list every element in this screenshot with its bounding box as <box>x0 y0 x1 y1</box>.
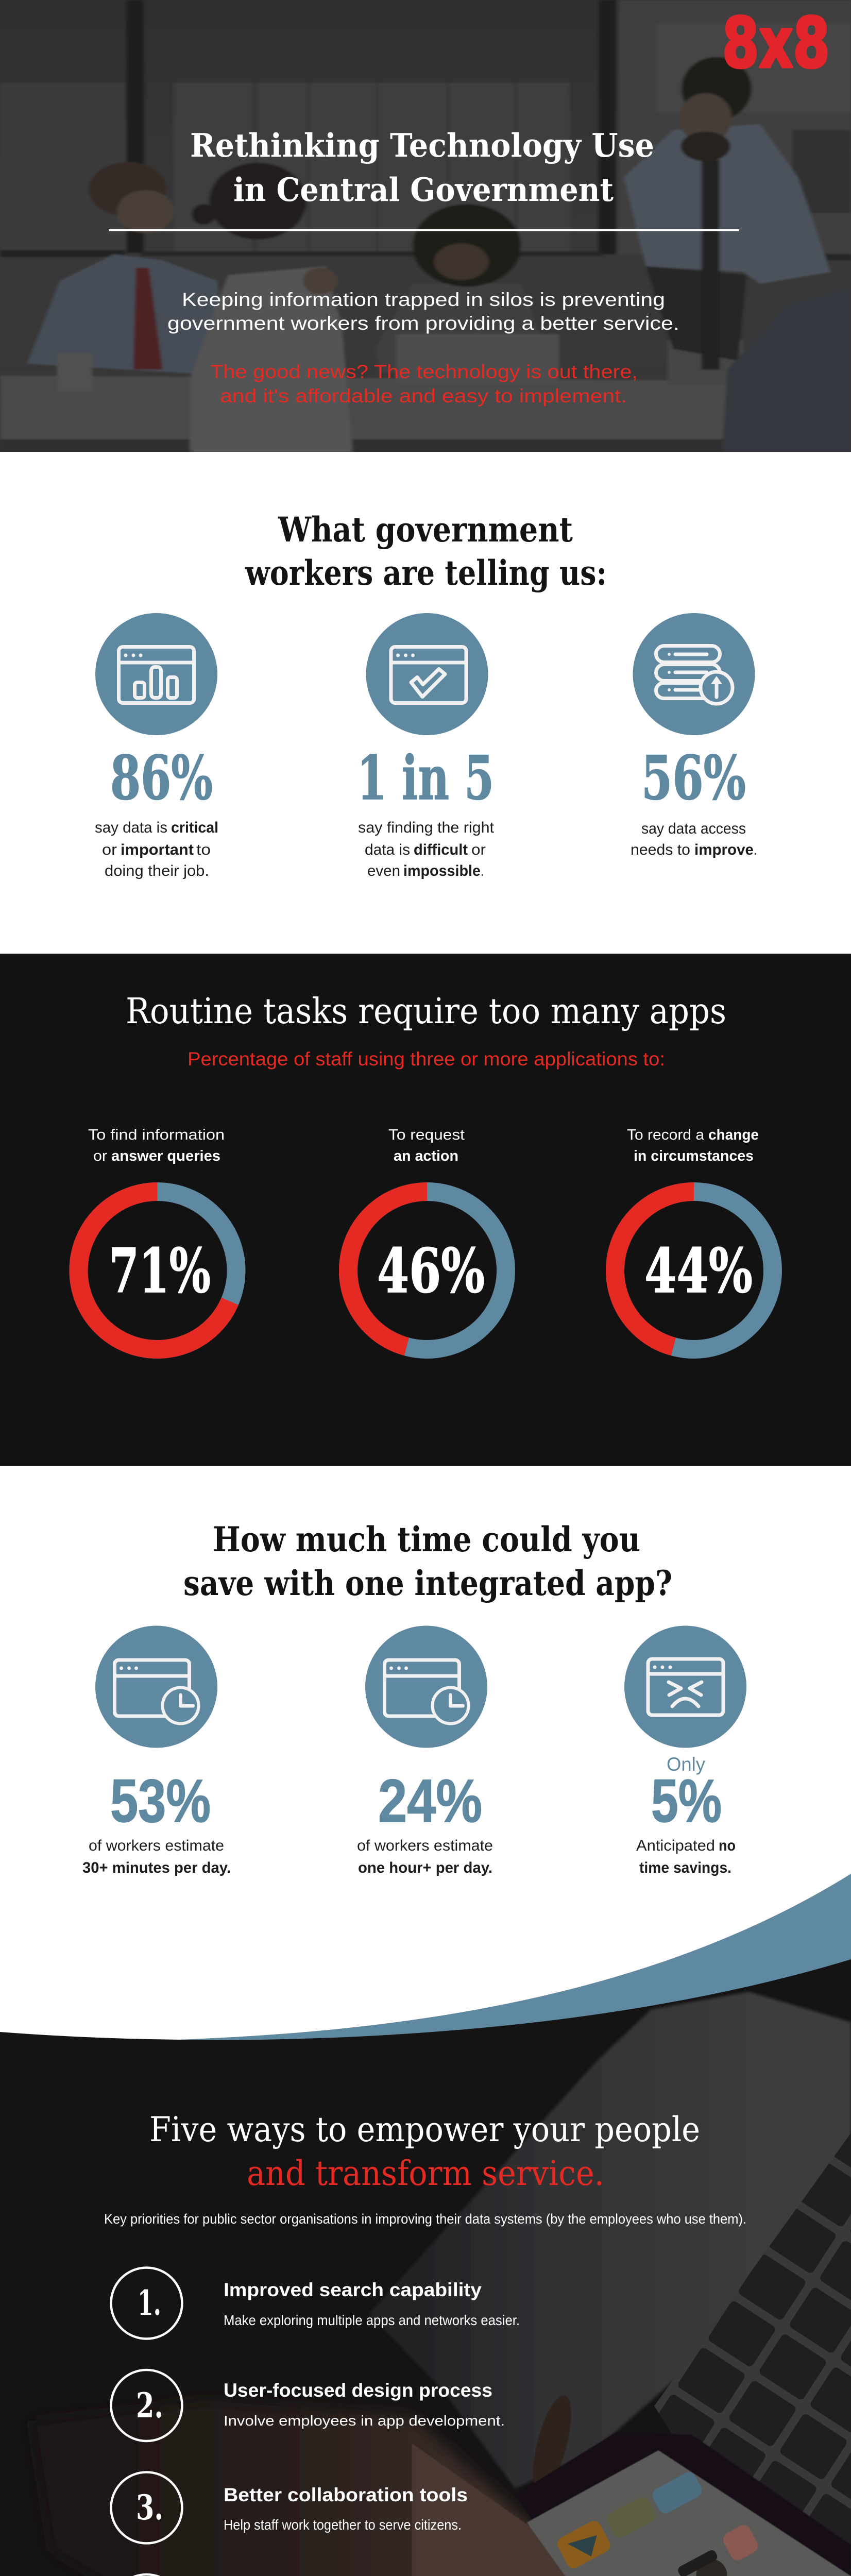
panel: routine tasks require too many apps <box>0 954 851 1466</box>
stat: 86%: 86% <box>110 742 213 814</box>
donut group: 71%: 71% <box>109 1235 211 1307</box>
donut group: 46%: an action <box>394 1148 458 1164</box>
donut group: 71%: or <box>93 1148 107 1164</box>
item 3 <box>111 2472 468 2543</box>
item 2 <box>111 2370 505 2441</box>
item 4 <box>111 2574 596 2576</box>
stat: only 5%: Only <box>667 1754 705 1775</box>
item 3: Help staff work together to serve citizens. <box>224 2517 462 2533</box>
stat: 1 in 5: difficult <box>414 841 468 858</box>
stat: 1 in 5 <box>357 742 495 879</box>
stat: 86%: say data is <box>95 819 167 836</box>
stat: 56% <box>631 742 757 858</box>
stat: 24%: 24% <box>378 1767 482 1835</box>
item 2: 2. <box>136 2385 163 2426</box>
donut group: 71%: answer queries <box>111 1148 220 1164</box>
icon: window with frustrated face <box>624 1626 746 1748</box>
stat: 1 in 5: 1 in 5 <box>357 742 494 814</box>
donut group: 71% <box>78 1127 236 1349</box>
panel: five ways background photo (hand holding phone) <box>0 1855 851 2576</box>
stat: 86%: important <box>121 841 194 858</box>
icon: window with clock <box>95 1626 217 1748</box>
heading: and transform service. <box>247 2154 604 2193</box>
heading: workers are telling us: <box>245 553 607 593</box>
donut group: 71%: To find information <box>88 1127 225 1143</box>
heading: Routine tasks require too many apps <box>126 991 726 1032</box>
intro text: Keeping information trapped in silos is preventing <box>182 289 665 310</box>
donut group: 46%: To request <box>388 1127 465 1143</box>
panel: five ways to empower your people <box>104 2110 746 2576</box>
item 3: Better collaboration tools <box>224 2484 468 2505</box>
stat: 24% <box>357 1767 493 1876</box>
intro line: Key priorities for public sector organisations in improving their data systems (by the employees who use them). <box>104 2211 746 2227</box>
stat: 56%: . <box>754 841 757 858</box>
stat: 1 in 5: say finding the right <box>358 819 495 836</box>
item 1: Improved search capability <box>224 2279 482 2300</box>
heading: How much time could you <box>213 1519 640 1560</box>
title divider <box>109 229 739 231</box>
stat: only 5%: 5% <box>651 1767 722 1835</box>
stat: 53% <box>82 1767 231 1876</box>
stat: 56%: needs to <box>631 841 690 858</box>
stat: only 5%: time savings. <box>639 1859 731 1876</box>
title: Rethinking Technology Use <box>190 126 654 164</box>
good news text: The good news? The technology is out there, <box>210 361 638 382</box>
stat: 56%: improve <box>694 841 754 858</box>
phone screen app icons <box>555 2469 760 2576</box>
stat: 86%: critical <box>171 819 218 836</box>
stat: 1 in 5: or <box>471 841 486 858</box>
stat: 53%: 53% <box>110 1767 211 1835</box>
hero photo: office meeting, darkened <box>0 0 851 454</box>
heading <box>183 1519 672 1603</box>
panel: what workers are telling us <box>95 510 757 879</box>
icon: window with check mark <box>366 613 488 735</box>
curved band: blue swoosh <box>179 1874 851 2040</box>
donut group: 44%: To record a <box>627 1127 705 1143</box>
stat: 86%: to <box>196 841 211 858</box>
stat: 86%: or <box>102 841 117 858</box>
white curved section background <box>0 1466 851 2040</box>
donut group: 46%: 46% <box>377 1235 485 1307</box>
good news text: and it's affordable and easy to implement. <box>220 385 627 406</box>
donut group: 44%: 44% <box>644 1235 753 1307</box>
icon: window with bar chart <box>95 613 217 735</box>
panel: how much time could you save <box>0 1466 851 2040</box>
intro text: government workers from providing a better service. <box>167 313 679 334</box>
heading <box>149 2110 700 2193</box>
donut group: 44%: in circumstances <box>634 1148 754 1164</box>
title <box>190 126 654 209</box>
stat: 53%: of workers estimate <box>89 1837 224 1854</box>
heading: Five ways to empower your people <box>149 2110 700 2149</box>
intro text <box>167 289 679 334</box>
item 1: 1. <box>138 2283 161 2323</box>
stat: 56%: 56% <box>641 742 746 814</box>
stat: 24%: one hour+ per day. <box>358 1859 492 1876</box>
stat: only 5% <box>636 1754 736 1876</box>
item 2: User-focused design process <box>224 2380 492 2401</box>
icon: window with clock <box>365 1626 487 1748</box>
heading <box>245 510 607 593</box>
panel: hero <box>0 0 851 454</box>
stat: 53%: 30+ minutes per day. <box>82 1859 231 1876</box>
stat: 56%: say data access <box>641 820 746 837</box>
stat: 24%: of workers estimate <box>357 1837 493 1854</box>
item 3: 3. <box>136 2487 163 2528</box>
heading: save with one integrated app? <box>183 1563 672 1603</box>
stat: 1 in 5: even <box>367 862 400 879</box>
title: in Central Government <box>233 171 614 209</box>
stat: 1 in 5: data is <box>365 841 410 858</box>
stat: 86% <box>95 742 218 879</box>
stat: 86%: doing their job. <box>105 862 209 879</box>
donut group: 44%: change <box>708 1127 759 1143</box>
good news text <box>210 361 638 406</box>
item 1 <box>111 2268 520 2339</box>
subheading: Percentage of staff using three or more applications to: <box>188 1048 665 1070</box>
item 1: Make exploring multiple apps and networks easier. <box>224 2312 520 2328</box>
icon: server stack with upload arrow <box>633 613 755 735</box>
donut group: 46% <box>348 1127 506 1349</box>
item 2: Involve employees in app development. <box>224 2413 505 2429</box>
stat: 1 in 5: . <box>481 862 484 879</box>
heading: What government <box>278 510 573 550</box>
donut group: 44% <box>615 1127 773 1349</box>
stat: 1 in 5: impossible <box>403 862 481 879</box>
stat: only 5%: no <box>719 1837 736 1854</box>
stat: only 5%: Anticipated <box>636 1837 715 1854</box>
